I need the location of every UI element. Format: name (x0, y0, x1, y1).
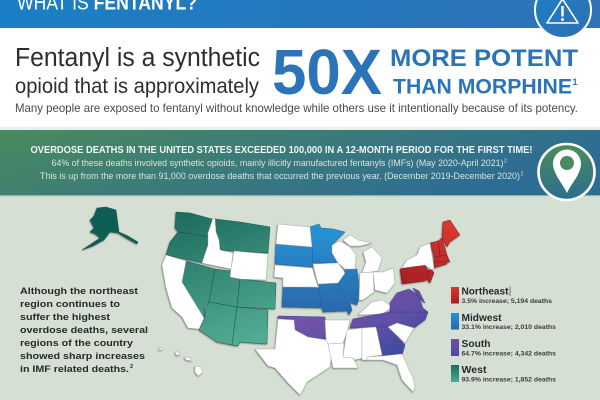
icon: warning triangle (535, 0, 591, 38)
callout text: 2 (130, 364, 133, 370)
map of the United States (82, 207, 460, 395)
legend: northeast: Northeast (462, 286, 509, 298)
callout text: Although the northeast (20, 286, 139, 297)
legend: midwest (451, 313, 556, 331)
stat label: MORE POTENT (390, 45, 578, 72)
text: exposure note: Many people are exposed to fentanyl without knowledge while others use it intentionally because of its potency. (15, 102, 578, 115)
banner details: This is up from the more than 91,000 overdose deaths that occurred the previous year. (December 2019-December 2020) (40, 171, 520, 181)
callout text: in IMF related deaths. (20, 364, 129, 375)
banner details (40, 158, 524, 181)
legend: northeast (451, 286, 552, 305)
banner details: 2 (520, 172, 524, 178)
banner headline: OVERDOSE DEATHS IN THE UNITED STATES EXCEEDED 100,000 IN A 12-MONTH PERIOD FOR THE FIRST TIME! (30, 145, 532, 156)
text: fentanyl description: opioid that is approximately (15, 75, 259, 98)
stat label (390, 45, 578, 98)
green banner (0, 130, 600, 195)
callout text: region continues to (20, 299, 120, 310)
white new york (402, 243, 434, 270)
text: fentanyl description (15, 44, 260, 98)
stat label: 1 (572, 77, 578, 87)
legend: west (451, 365, 556, 384)
legend: south (451, 339, 556, 358)
big stat: 50X: 50X (272, 36, 382, 108)
legend: northeast: 3.5% increase; 5,194 deaths (462, 298, 552, 305)
west region (82, 207, 276, 346)
map section background (0, 195, 600, 400)
callout text: suffer the highest (20, 312, 111, 323)
banner details: 64% of these deaths involved synthetic opioids, mainly illicitly manufactured fentanyls (IMFs) (May 2020-April 2021) (52, 158, 504, 168)
callout text: regions of the country (20, 338, 134, 349)
callout text: showed sharp increases (20, 351, 145, 362)
stat label: THAN MORPHINE (393, 76, 572, 98)
south region (278, 288, 428, 356)
legend (451, 286, 556, 384)
callout text: overdose deaths, several (20, 325, 148, 336)
icon: location pin (538, 144, 594, 200)
white southern states (255, 319, 415, 395)
legend: south: South (462, 339, 490, 350)
legend: midwest: Midwest (462, 313, 502, 324)
white western states (159, 218, 268, 376)
intro statement (15, 36, 578, 115)
callout text (20, 286, 148, 375)
text: fentanyl description: Fentanyl is a synthetic (15, 44, 260, 72)
white midwest states (274, 224, 395, 315)
legend: midwest: 33.1% increase; 2,010 deaths (462, 324, 556, 331)
northeast region (400, 220, 460, 284)
legend: west: West (462, 365, 487, 376)
midwest region (275, 224, 360, 315)
pale band above green banner (0, 127, 600, 130)
legend: west: 93.9% increase; 1,852 deaths (462, 376, 556, 384)
header bar (0, 0, 600, 28)
legend: south: 64.7% increase; 4,342 deaths (462, 350, 556, 358)
banner details: 2 (504, 158, 507, 164)
